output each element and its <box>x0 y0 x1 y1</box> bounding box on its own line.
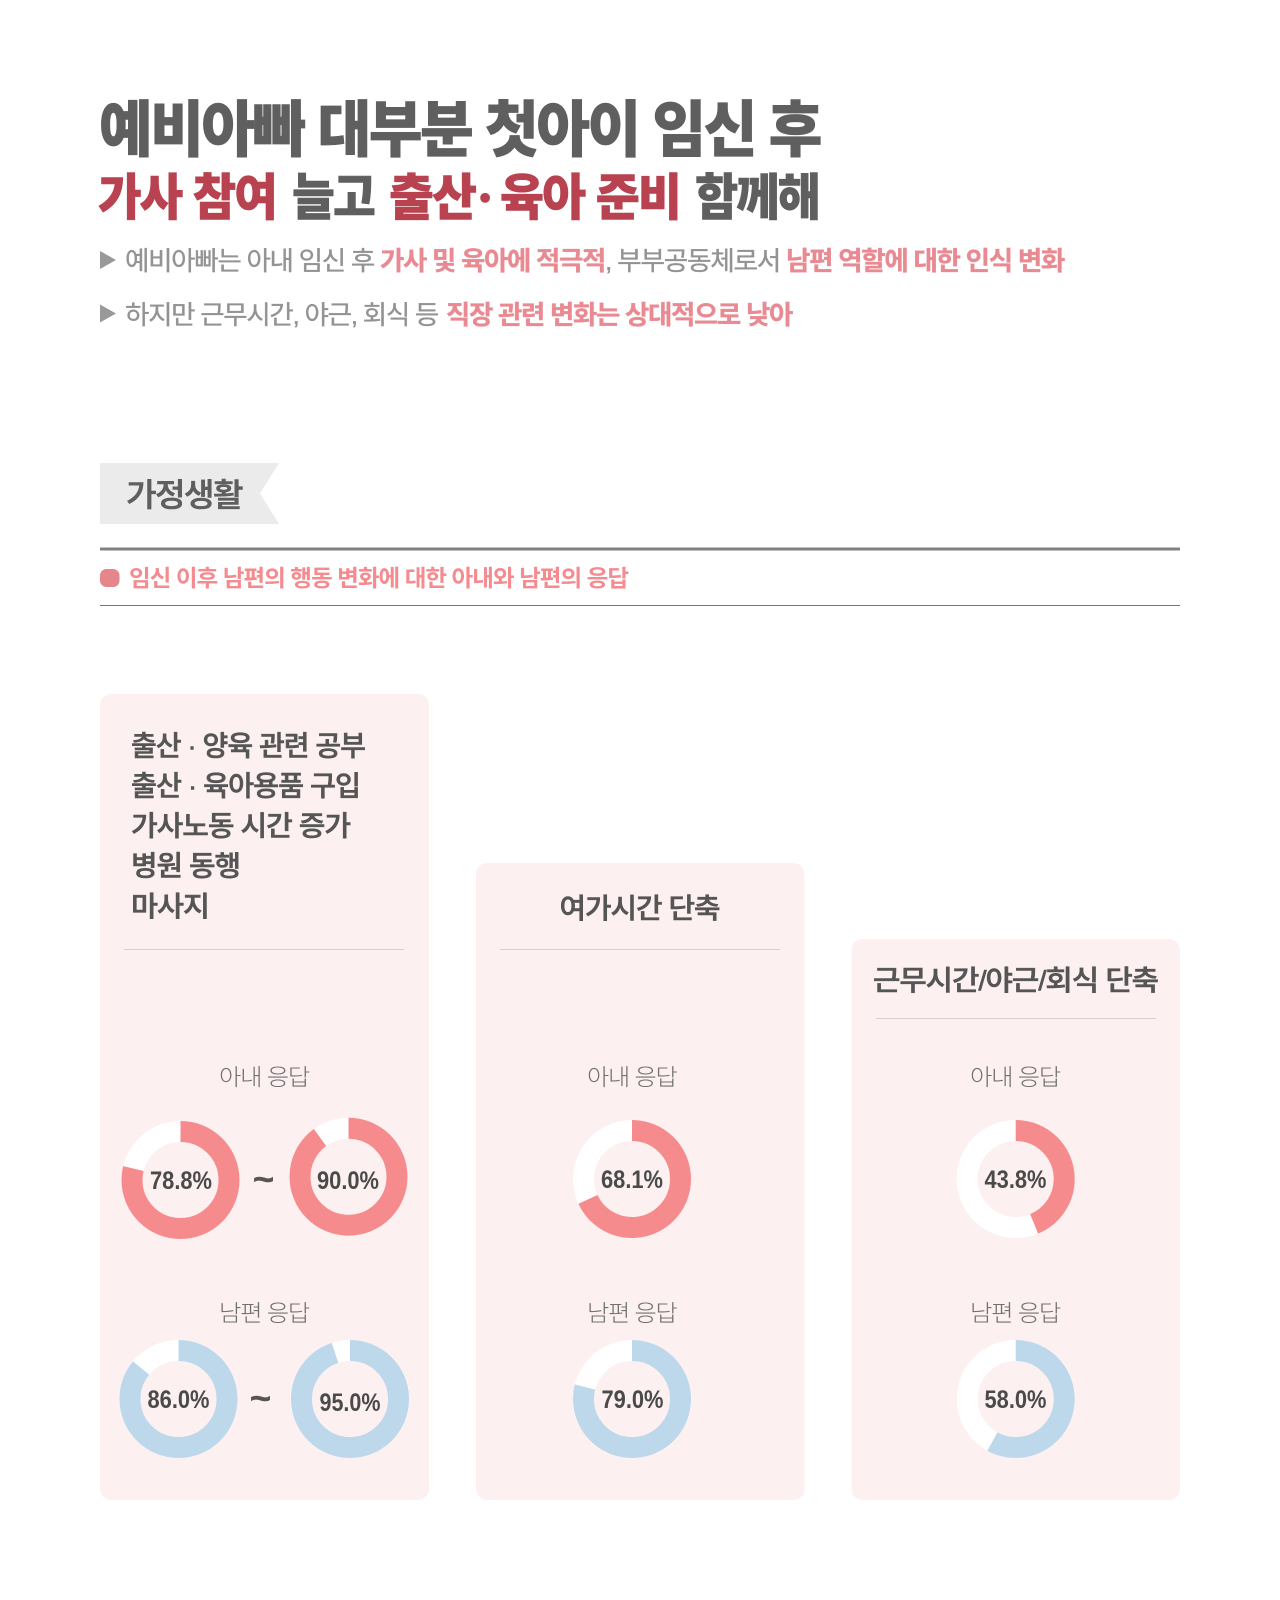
label: wife response: 아내 응답 <box>219 1064 310 1090</box>
panel heading list: 출산 · 양육 관련 공부 <box>131 730 365 762</box>
label: husband response: 남편 응답 <box>970 1300 1061 1326</box>
panel heading list <box>131 730 365 922</box>
summary bullet 1: 남편 역할에 대한 인식 변화 <box>786 246 1065 276</box>
panel heading list: 가사노동 시간 증가 <box>131 810 350 842</box>
summary bullet 2: 하지만 근무시간, 야근, 회식 등 <box>125 300 438 330</box>
panel heading list: 출산 · 육아용품 구입 <box>131 770 360 802</box>
label: wife response: 아내 응답 <box>587 1064 678 1090</box>
donut: husband 95.0%: 95.0% <box>320 1389 380 1417</box>
range tilde: ~ <box>250 1380 271 1416</box>
summary bullet 1: , 부부공동체로서 <box>605 246 780 276</box>
label: wife response: 아내 응답 <box>970 1064 1061 1090</box>
panel heading: 근무시간/야근/회식 단축 <box>873 965 1158 996</box>
panel heading list: 마사지 <box>131 891 209 922</box>
title <box>98 96 820 226</box>
title line 2: 함께해 <box>695 170 819 226</box>
donut: wife 90.0%: 90.0% <box>317 1167 379 1195</box>
panel heading list: 병원 동행 <box>131 850 240 882</box>
summary bullet 1 <box>100 246 1065 276</box>
title line 2: 육아 준비 <box>500 170 680 226</box>
donut: wife 43.8% <box>967 1130 1064 1228</box>
donut: husband 86.0%: 86.0% <box>148 1386 210 1414</box>
summary bullet 2: 직장 관련 변화는 상대적으로 낮아 <box>446 300 793 330</box>
title line 2: 가사 참여 <box>98 170 276 226</box>
title line 2: • <box>480 180 491 216</box>
donut: wife 68.1%: 68.1% <box>601 1166 663 1194</box>
summary bullet 2 <box>100 300 793 330</box>
panel heading: 여가시간 단축 <box>560 893 720 924</box>
title line 1: 예비아빠 대부분 첫아이 임신 후 <box>99 96 820 164</box>
section tag: family life: 가정생활 <box>126 477 243 513</box>
donut: wife 90.0% <box>300 1128 397 1225</box>
title line 2: 늘고 <box>292 170 375 226</box>
summary bullet 1: 가사 및 육아에 적극적 <box>380 246 605 276</box>
donut: wife 68.1% <box>584 1130 680 1228</box>
donut: husband 86.0% <box>130 1350 227 1448</box>
donut: husband 58.0%: 58.0% <box>984 1386 1046 1414</box>
donut: husband 58.0% <box>967 1350 1064 1448</box>
title line 2 <box>98 170 819 226</box>
donut: wife 78.8%: 78.8% <box>150 1167 212 1195</box>
label: husband response: 남편 응답 <box>219 1300 310 1326</box>
title line 2: 출산 <box>389 170 476 226</box>
range tilde: ~ <box>253 1161 274 1197</box>
panel: shorter working hours <box>852 939 1180 1500</box>
subheading: 임신 이후 남편의 행동 변화에 대한 아내와 남편의 응답 <box>129 565 629 591</box>
donut: wife 78.8% <box>132 1132 229 1228</box>
label: husband response: 남편 응답 <box>587 1300 678 1326</box>
panel: childbirth and housework <box>100 694 429 1500</box>
panel: less leisure time <box>476 863 804 1500</box>
section tag: family life <box>100 463 279 524</box>
donut: husband 79.0% <box>584 1350 680 1448</box>
donut: husband 95.0% <box>302 1350 398 1448</box>
summary bullet 1: 예비아빠는 아내 임신 후 <box>125 246 374 276</box>
donut: wife 43.8%: 43.8% <box>984 1166 1046 1194</box>
donut: husband 79.0%: 79.0% <box>602 1386 664 1414</box>
